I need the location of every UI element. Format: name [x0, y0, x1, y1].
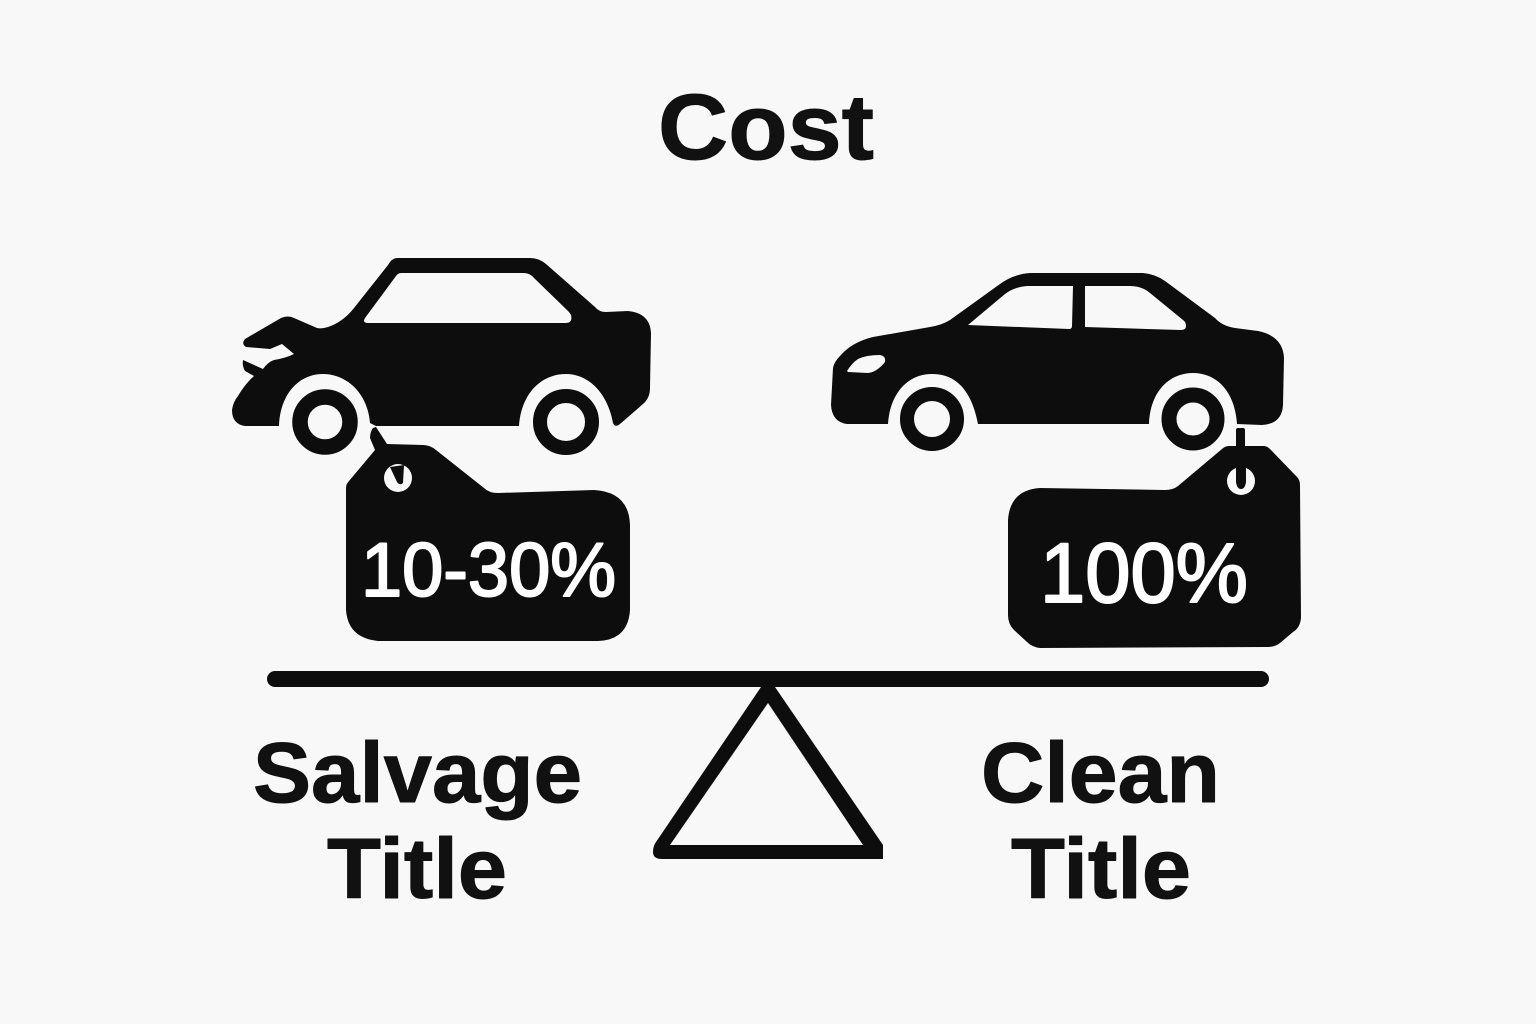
icon: front wheel: [907, 394, 957, 444]
label: Clean Title: Title: [1011, 822, 1191, 917]
label: Clean Title: [981, 726, 1220, 917]
scale beam: [267, 671, 1269, 687]
icon: clean title car: [831, 273, 1284, 444]
label: Salvage Title: Title: [327, 822, 507, 917]
icon: left wheel: [300, 397, 350, 447]
icon: damaged salvage car: [232, 258, 651, 448]
title: Cost: [658, 75, 874, 179]
tag hole: [1227, 465, 1255, 495]
tag hole: [384, 464, 412, 492]
scale fulcrum triangle: [653, 687, 883, 859]
label: Salvage Title: [253, 726, 582, 917]
label: Salvage Title: Salvage: [253, 726, 582, 821]
label: Clean Title: Clean: [981, 726, 1220, 821]
price tag: clean 100%: [1008, 428, 1301, 648]
icon: rear wheel: [1169, 395, 1217, 443]
price label: 100%: 100%: [1040, 526, 1248, 620]
price label: 10-30%: 10-30%: [361, 528, 616, 613]
icon: right wheel: [540, 396, 592, 448]
price tag: salvage 10-30%: [346, 427, 630, 641]
